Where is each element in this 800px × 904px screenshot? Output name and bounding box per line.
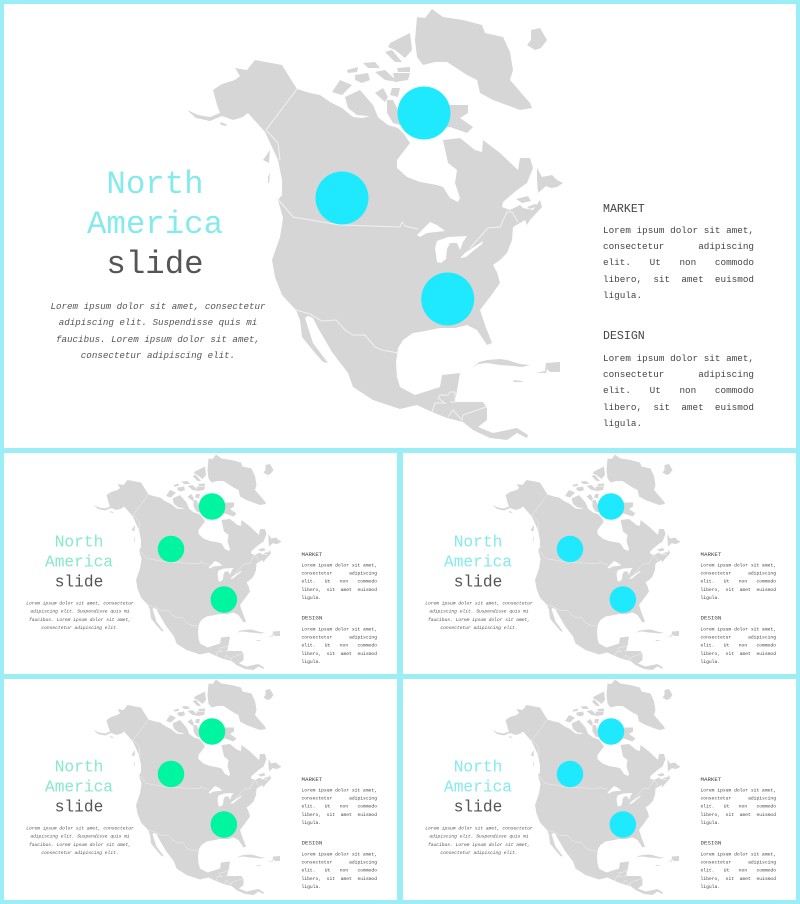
text: market: libero, sit amet euismod — [700, 587, 776, 592]
map: North America — [94, 680, 282, 895]
text: design: consectetur adipiscing — [302, 860, 377, 865]
lead paragraph: consectetur adipiscing elit. — [41, 625, 119, 631]
text: design — [700, 626, 776, 664]
heading: design: DESIGN — [603, 330, 645, 343]
text: design: Lorem ipsum dolor sit amet, — [302, 626, 377, 632]
lead paragraph: adipiscing elit. Suspendisse quis mi — [30, 834, 130, 839]
marker circles — [556, 493, 636, 613]
text: market: elit. Ut non commodo — [700, 804, 776, 809]
text: market: Lorem ipsum dolor sit amet, — [302, 788, 377, 793]
text: design: ligula. — [302, 659, 321, 664]
text: market: Lorem ipsum dolor sit amet, — [700, 562, 776, 568]
lead paragraph: faucibus. Lorem ipsum dolor sit amet, — [56, 334, 260, 345]
text: market: libero, sit amet euismod — [302, 812, 377, 817]
heading: design: DESIGN — [700, 615, 721, 622]
panel: main slide cyan — [4, 4, 796, 448]
text: market: libero, sit amet euismod — [302, 587, 377, 592]
lead paragraph — [26, 600, 134, 631]
text: design: ligula. — [700, 659, 720, 664]
marker circles — [316, 86, 474, 326]
title: North — [453, 758, 502, 776]
text: market — [302, 788, 377, 825]
title: North — [453, 533, 502, 552]
text: market: ligula. — [302, 820, 321, 825]
text: design: Lorem ipsum dolor sit amet, — [700, 626, 776, 632]
marker circles — [556, 718, 636, 838]
title — [45, 758, 113, 816]
text: design: Lorem ipsum dolor sit amet, — [603, 353, 754, 364]
title: North — [55, 758, 103, 776]
lead paragraph: faucibus. Lorem ipsum dolor sit amet, — [29, 842, 131, 847]
title — [87, 166, 223, 283]
title: slide — [55, 573, 103, 592]
title: America — [45, 553, 113, 572]
heading: design: DESIGN — [302, 840, 322, 846]
text: market: elit. Ut non commodo — [700, 579, 776, 584]
text: market — [700, 562, 776, 600]
text: market: elit. Ut non commodo — [302, 579, 377, 584]
lead paragraph: Lorem ipsum dolor sit amet, consectetur — [26, 600, 134, 606]
title — [443, 758, 512, 816]
heading: market: MARKET — [700, 776, 721, 783]
lead paragraph: Lorem ipsum dolor sit amet, consectetur — [425, 826, 532, 831]
text: market: consectetur adipiscing — [603, 241, 754, 252]
text: design: libero, sit amet euismod — [302, 876, 377, 881]
text: market: consectetur adipiscing — [700, 571, 776, 576]
lead paragraph — [425, 826, 533, 856]
marker circles — [158, 718, 238, 838]
text: market: Lorem ipsum dolor sit amet, — [302, 562, 377, 568]
title: America — [45, 778, 113, 796]
lead paragraph: faucibus. Lorem ipsum dolor sit amet, — [29, 617, 131, 622]
text: design: libero, sit amet euismod — [700, 876, 776, 881]
text: market — [700, 788, 776, 825]
lead paragraph: consectetur adipiscing elit. — [440, 625, 517, 631]
text: design: elit. Ut non commodo — [700, 643, 776, 648]
text: market: Lorem ipsum dolor sit amet, — [700, 788, 776, 793]
panel: small slide green top left — [4, 453, 397, 674]
text: market: consectetur adipiscing — [302, 571, 377, 576]
lead paragraph: consectetur adipiscing elit. — [41, 850, 119, 856]
title: slide — [55, 798, 103, 816]
panel: small slide cyan top right — [403, 453, 796, 674]
title — [443, 533, 512, 592]
text: design — [302, 852, 377, 889]
title: America — [443, 553, 512, 572]
text: design: consectetur adipiscing — [302, 635, 377, 640]
lead paragraph: consectetur adipiscing elit. — [81, 350, 235, 361]
lead paragraph — [50, 301, 266, 361]
text: design: Lorem ipsum dolor sit amet, — [700, 852, 776, 857]
text: design: libero, sit amet euismod — [700, 651, 776, 656]
text: market: ligula. — [700, 595, 720, 600]
title: slide — [453, 798, 502, 816]
text: design — [700, 852, 776, 889]
text: design: elit. Ut non commodo — [603, 385, 754, 396]
map: North America — [492, 680, 680, 895]
lead paragraph: Lorem ipsum dolor sit amet, consectetur — [26, 826, 134, 831]
text: design — [302, 626, 377, 664]
text: design: libero, sit amet euismod — [302, 651, 377, 656]
heading: market: MARKET — [700, 552, 721, 558]
text: market: Lorem ipsum dolor sit amet, — [603, 225, 754, 236]
text: design: elit. Ut non commodo — [700, 868, 776, 873]
lead paragraph: adipiscing elit. Suspendisse quis mi — [429, 834, 528, 839]
heading: market: MARKET — [302, 552, 322, 558]
text: market: libero, sit amet euismod — [603, 274, 754, 285]
text: design: consectetur adipiscing — [700, 860, 776, 865]
text: design: libero, sit amet euismod — [603, 402, 754, 413]
map: North America — [187, 9, 563, 440]
text: market: consectetur adipiscing — [700, 796, 776, 801]
lead paragraph: adipiscing elit. Suspendisse quis mi — [429, 609, 528, 614]
text: design: Lorem ipsum dolor sit amet, — [302, 852, 377, 857]
text: market: elit. Ut non commodo — [302, 804, 377, 809]
lead paragraph: consectetur adipiscing elit. — [440, 850, 517, 856]
text: market: libero, sit amet euismod — [700, 812, 776, 817]
text: design — [603, 353, 754, 429]
text: market — [603, 225, 754, 301]
lead paragraph: adipiscing elit. Suspendisse quis mi — [59, 317, 257, 328]
lead paragraph — [425, 600, 533, 631]
heading: market: MARKET — [302, 776, 322, 783]
text: design: elit. Ut non commodo — [302, 643, 377, 648]
title: North — [106, 166, 204, 203]
map: North America — [492, 454, 680, 670]
title: America — [443, 778, 512, 796]
text: design: consectetur adipiscing — [603, 369, 754, 380]
title: North — [55, 533, 103, 552]
map: North America — [94, 454, 282, 670]
panel: small slide cyan bottom right — [403, 679, 796, 900]
title: slide — [453, 573, 502, 592]
text: market — [302, 562, 377, 600]
lead paragraph: adipiscing elit. Suspendisse quis mi — [30, 609, 130, 614]
marker circles — [158, 493, 238, 613]
lead paragraph: Lorem ipsum dolor sit amet, consectetur — [425, 600, 532, 606]
heading: market: MARKET — [603, 203, 645, 216]
lead paragraph — [26, 826, 134, 856]
title: America — [87, 206, 223, 243]
text: design: elit. Ut non commodo — [302, 868, 377, 873]
text: market: ligula. — [302, 595, 321, 600]
text: market: consectetur adipiscing — [302, 796, 377, 801]
text: market: ligula. — [603, 290, 642, 301]
heading: design: DESIGN — [700, 840, 721, 846]
lead paragraph: faucibus. Lorem ipsum dolor sit amet, — [428, 842, 530, 847]
title — [45, 533, 113, 592]
panel: small slide green bottom left — [4, 679, 397, 900]
text: market: ligula. — [700, 820, 720, 825]
heading: design: DESIGN — [302, 615, 322, 622]
text: market: elit. Ut non commodo — [603, 257, 754, 268]
text: design: consectetur adipiscing — [700, 635, 776, 640]
lead paragraph: Lorem ipsum dolor sit amet, consectetur — [50, 301, 266, 312]
text: design: ligula. — [302, 884, 321, 889]
text: design: ligula. — [603, 418, 642, 429]
text: design: ligula. — [700, 884, 720, 889]
title: slide — [106, 246, 204, 283]
lead paragraph: faucibus. Lorem ipsum dolor sit amet, — [428, 617, 530, 622]
